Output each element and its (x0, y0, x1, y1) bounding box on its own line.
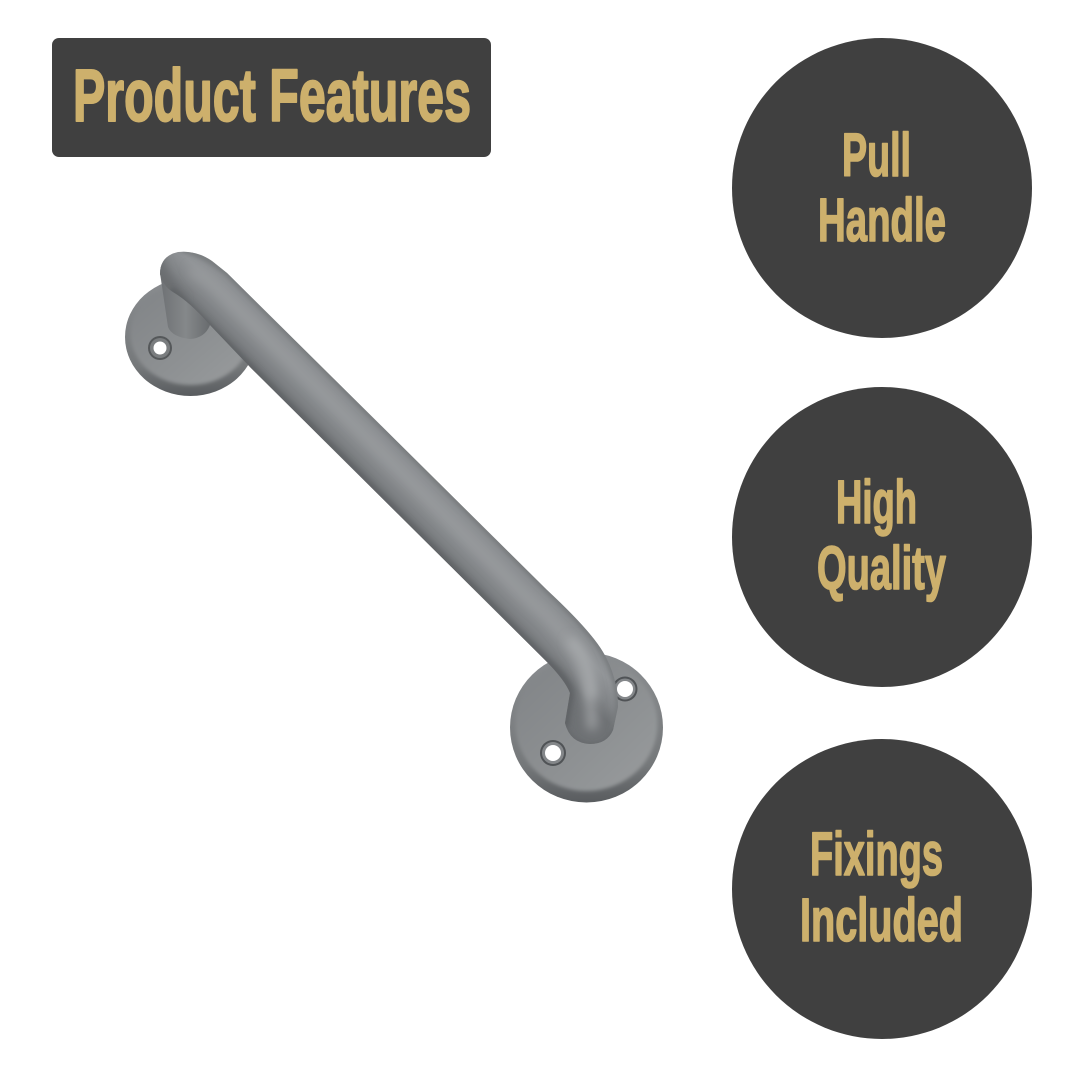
bar shading (157, 250, 618, 746)
circle text: High Quality: Quality (817, 534, 946, 602)
circle text: Fixings Included (800, 820, 963, 954)
circle text: High Quality: High (836, 468, 917, 536)
circle text: Fixings Included: Fixings (810, 820, 943, 888)
circle text: Pull Handle (818, 121, 946, 254)
top mounting plate (125, 278, 256, 396)
circle text: Pull Handle: Handle (818, 186, 946, 254)
circle: high quality (732, 387, 1032, 687)
top stem (160, 273, 212, 339)
circle: fixings included (732, 739, 1032, 1039)
handle bar (150, 240, 630, 750)
title text: Product Features (73, 54, 471, 137)
title banner (52, 38, 491, 157)
bottom mounting plate (510, 652, 663, 802)
circle text: Fixings Included: Included (800, 886, 963, 954)
circle text: High Quality (817, 468, 946, 602)
circle text: Pull Handle: Pull (842, 121, 911, 189)
product image: pull handle (125, 240, 663, 802)
circle: pull handle (732, 38, 1032, 338)
